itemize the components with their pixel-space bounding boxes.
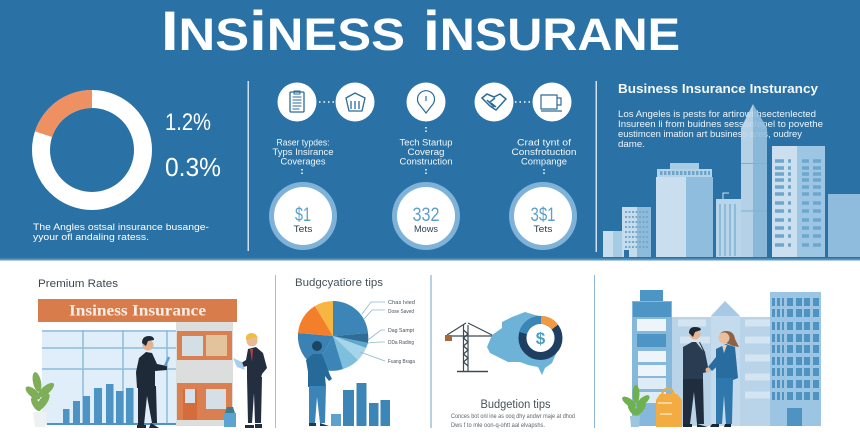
panel: budgeting: [445, 312, 575, 429]
middle building: [672, 301, 771, 426]
title: [161, 0, 680, 62]
panel: premium rates: [24, 278, 267, 428]
divider right: [596, 81, 597, 252]
stat circle three: Tets: [534, 224, 553, 234]
connector dots: [302, 127, 544, 176]
right body text: eustimcen imation art business ares, oudrey: [618, 129, 803, 139]
pie labels: DDa Rading: [388, 340, 414, 346]
label: third column: Compange: [521, 156, 567, 166]
donut percentages: 1.2%: [165, 109, 211, 136]
title: INSiNESS: [161, 0, 405, 62]
right body text: Los Angeles is pests for artirowithsectenlected: [618, 109, 816, 119]
title: iNSURANE: [423, 0, 680, 62]
label: second column: Coverag: [408, 147, 444, 157]
pie labels: Fuang Braga: [388, 359, 416, 365]
panel: blue header: [0, 0, 860, 260]
donut percentages: 0.3%: [165, 152, 221, 182]
person: man with papers: [233, 333, 267, 428]
heading: premium rates: Premium Rates: [38, 278, 119, 290]
divider left: [248, 81, 249, 251]
budget text: [451, 414, 575, 429]
storefront: [176, 322, 233, 426]
window wall: [42, 330, 177, 425]
pie labels: Dose Saved: [388, 309, 414, 315]
right heading: Business Insurance Insturancy: [618, 81, 819, 96]
skyline illustration: [603, 104, 860, 257]
heading: Budgcyatiore tips: [295, 277, 384, 289]
pie chart: [298, 301, 368, 371]
icon: handshake: [474, 82, 514, 122]
stat circle one: Tets: [294, 224, 313, 234]
donut caption: The Angles ostsal insurance busange-: [33, 222, 209, 232]
banner: [38, 299, 237, 322]
bar chart: [331, 383, 390, 426]
label: third column: [512, 138, 576, 166]
connector dots: [515, 101, 532, 103]
stat circle one: $1: [295, 205, 311, 226]
label: first column: Raser typdes:: [276, 138, 330, 148]
icon: shield basket: [336, 82, 374, 122]
label: second column: Construction: [400, 156, 452, 166]
stat circle one: [269, 182, 337, 250]
stat circle two: 332: [412, 205, 440, 226]
stat circle three: [509, 182, 577, 250]
panel: handshake scene: [620, 290, 821, 427]
label: first column: [272, 138, 334, 166]
icon: laptop: [532, 82, 572, 122]
person viewing chart: [306, 341, 332, 426]
plant: [620, 385, 651, 427]
stat circle two: [392, 182, 460, 250]
stat circle three: 3$1: [530, 205, 556, 226]
label: second column: [400, 138, 452, 166]
label: third column: Crad tynt of: [517, 138, 572, 148]
pie labels: [388, 300, 416, 365]
heading: budgetion tips: Budgetion tips: [480, 399, 551, 411]
divider: [594, 275, 596, 428]
pot: [224, 407, 236, 427]
right tower: [770, 292, 821, 426]
right body text: Insureen li from buidnes sessonlepel to povethe: [618, 119, 823, 129]
panel: budget pie: [295, 277, 416, 426]
left tower: [632, 290, 672, 426]
donut caption: yyour ofl andaling ratess.: [33, 232, 149, 242]
orange bag: [656, 388, 682, 427]
right body text: [618, 109, 823, 149]
donut percentages: [165, 109, 221, 182]
label: third column: Consfrotuction: [512, 147, 576, 157]
right body text: dame.: [618, 139, 645, 149]
plant: [24, 371, 56, 427]
pie leader lines: [360, 302, 385, 361]
cloud map: [487, 312, 562, 375]
person: man with tablet: [136, 336, 169, 428]
icon row: [278, 82, 572, 122]
pie labels: Chas Ivied: [388, 300, 415, 306]
column labels: [272, 138, 576, 166]
pie labels: Dag Sampt: [388, 328, 414, 334]
woman in suit: [706, 331, 739, 427]
banner: Insiness Insurance: [69, 302, 206, 320]
donut caption: [33, 222, 209, 242]
dividers lower: [274, 275, 276, 428]
connector dots: [319, 101, 336, 103]
label: second column: Tech Startup: [400, 138, 452, 148]
budget text: Conces bot onl ine as ooq dhy andwr maje at dhod: [451, 414, 575, 420]
label: first column: Coverages: [280, 156, 326, 166]
budget text: Dws f to mle oon-q-ohtt aal elvapshs.: [451, 423, 545, 429]
icon: clipboard: [278, 82, 316, 122]
label: first column: Typs Insirance: [272, 147, 334, 157]
crane: [445, 323, 492, 372]
man in suit: [683, 327, 708, 427]
bar chart: [47, 384, 177, 425]
donut chart: [41, 99, 143, 201]
icon: location clock: [406, 82, 446, 122]
stat circle two: Mows: [414, 224, 438, 234]
money donut: $: [536, 329, 546, 348]
divider: [430, 275, 432, 428]
